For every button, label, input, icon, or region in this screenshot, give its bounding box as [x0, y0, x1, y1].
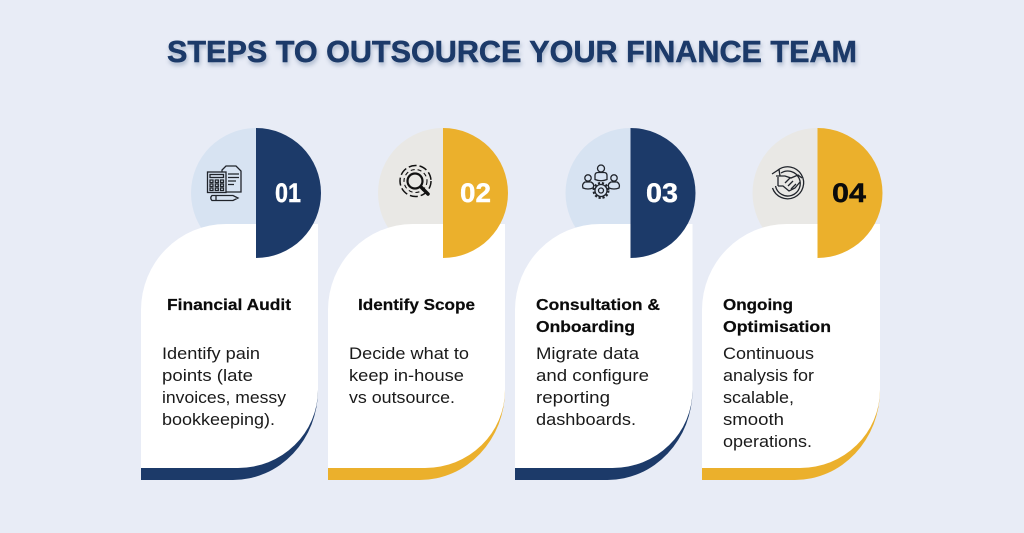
dark half circle: [630, 128, 696, 258]
body text: scalable,: [723, 389, 794, 407]
body text: Decide what to: [349, 345, 469, 363]
icon: magnifier with dashed rings: [400, 166, 431, 196]
title: STEPS TO OUTSOURCE YOUR FINANCE TEAM: [167, 34, 857, 69]
body text: analysis for: [723, 367, 815, 385]
card accent: [702, 390, 880, 480]
body text: [349, 345, 469, 407]
panel: step 3 Consultation and Onboarding: [515, 128, 696, 480]
body text: keep in-house: [349, 367, 464, 385]
step number: 03: [646, 178, 678, 208]
white card: [702, 224, 880, 468]
panel: step 2 Identify Scope: [328, 128, 508, 480]
pale half circle: [752, 128, 818, 258]
heading: Ongoing: [723, 297, 793, 314]
body text: Migrate data: [536, 345, 640, 363]
white card: [515, 224, 692, 468]
icon: handshake in circular arrows: [772, 167, 804, 199]
step number: 01: [275, 178, 301, 208]
body text: reporting: [536, 389, 610, 407]
pale half circle: [378, 128, 443, 258]
heading: Optimisation: [723, 319, 831, 336]
body text: points (late: [162, 367, 253, 385]
pale half circle: [566, 128, 630, 258]
pale half circle: [191, 128, 256, 258]
body text: smooth: [723, 411, 784, 429]
body text: vs outsource.: [349, 389, 455, 407]
icon: people around a gear: [583, 165, 619, 198]
amber half circle: [443, 128, 508, 258]
body text: Identify pain: [162, 345, 260, 363]
panel: step 4 Ongoing Optimisation: [702, 128, 882, 480]
step number: 02: [460, 178, 491, 208]
heading: Onboarding: [536, 319, 635, 336]
card accent: [515, 390, 692, 480]
body text: operations.: [723, 433, 812, 451]
white card: [141, 224, 318, 468]
body text: invoices, messy: [162, 389, 287, 407]
body text: bookkeeping).: [162, 411, 275, 429]
heading: [536, 297, 660, 336]
body text: and configure: [536, 367, 649, 385]
body text: Continuous: [723, 345, 814, 363]
body text: [723, 345, 815, 451]
card accent: [328, 390, 505, 480]
panel: step 1 Financial Audit: [141, 128, 321, 480]
body text: [536, 345, 649, 429]
white card: [328, 224, 505, 468]
amber half circle: [818, 128, 882, 258]
heading: [723, 297, 831, 336]
body text: [162, 345, 287, 429]
step number: 04: [832, 178, 866, 208]
heading: Identify Scope: [358, 297, 475, 314]
body text: dashboards.: [536, 411, 636, 429]
heading: Consultation &: [536, 297, 660, 314]
heading: Financial Audit: [167, 297, 292, 314]
card accent: [141, 390, 318, 480]
dark half circle: [256, 128, 321, 258]
icon: calculator and document: [208, 166, 241, 200]
